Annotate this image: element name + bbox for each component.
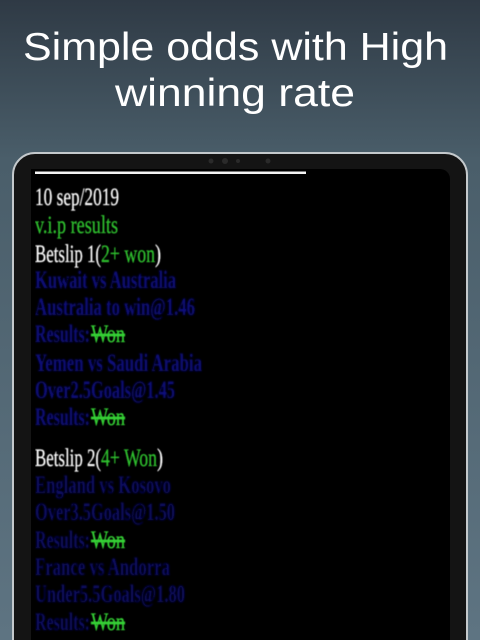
betslip 2 heading: Betslip 2( [35,445,101,472]
betslip 1 matches: Won [91,404,125,431]
betslip 2 matches: England vs Kosovo [35,472,171,499]
betslip 1 matches: Australia to win@1.46 [35,294,195,321]
betslip 2 heading: ) [157,445,163,472]
tablet device [13,153,467,640]
betslip 2 matches [35,472,185,636]
betslip 2 matches: France vs Andorra [35,554,170,581]
tablet frame [13,153,467,640]
betslip text [35,184,202,636]
top white bar [35,172,306,174]
betslip 1 matches: Won [91,321,125,348]
betslip 2 matches: Results: [35,527,90,554]
vip heading: v.i.p results [35,212,118,239]
betslip 2 matches: Over3.5Goals@1.50 [35,499,175,526]
betslip 2 matches: Results: [35,609,90,636]
betslip 2 matches: Under5.5Goals@1.80 [35,581,185,608]
date: 10 sep/2019 [35,184,119,211]
betslip 2 matches: Won [91,609,125,636]
betslip 1 matches: Kuwait vs Australia [35,267,176,294]
title [23,26,448,115]
betslip 1 matches: Over2.5Goals@1.45 [35,377,175,404]
betslip 1 matches: Results: [35,404,90,431]
tablet screen [31,169,450,640]
betslip 1 matches [35,267,202,431]
betslip 1 heading: ) [155,241,161,268]
betslip 1 matches: Yemen vs Saudi Arabia [35,350,202,377]
betslip 2 matches: Won [91,527,125,554]
title: Simple odds with High [23,26,448,69]
title: winning rate [114,72,355,115]
betslip 1 matches: Results: [35,321,90,348]
betslip 2 heading: 4+ Won [101,445,157,472]
betslip 1 heading: 2+ won [101,241,155,268]
betslip 1 heading: Betslip 1( [35,241,101,268]
camera sensors [208,158,270,164]
